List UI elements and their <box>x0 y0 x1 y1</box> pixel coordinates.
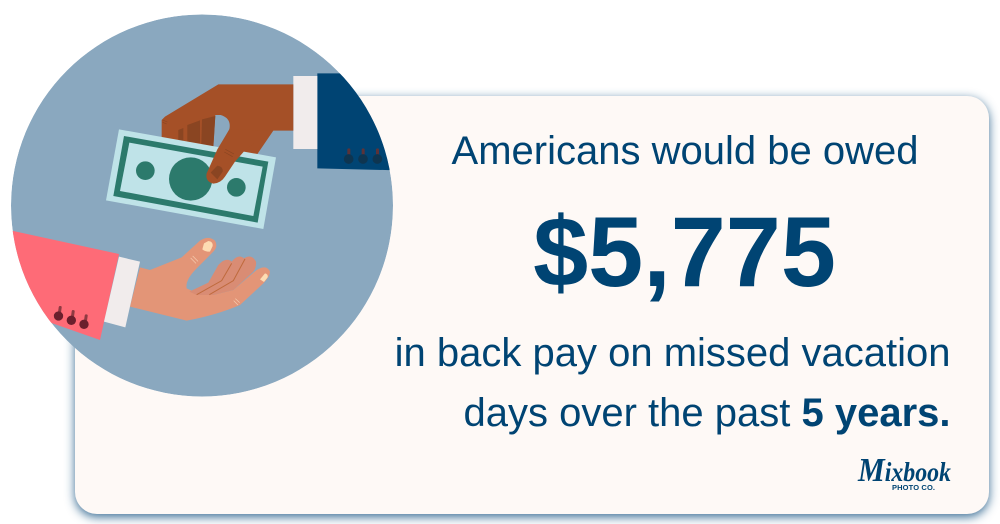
panel: text card <box>75 96 989 514</box>
icon: receiving hand with pink sleeve <box>0 227 270 340</box>
icon: pink sleeve buttons <box>54 306 89 329</box>
circle background <box>11 14 393 396</box>
big number: dollar amount: $5,775 <box>533 196 836 307</box>
icon: navy sleeve buttons <box>344 148 382 164</box>
illustration: hands exchanging money <box>0 14 410 396</box>
icon: thumb <box>206 129 273 184</box>
icon: dollar bill <box>106 129 276 229</box>
text block: years line: days over the past 5 years. <box>464 391 950 435</box>
heading: intro line: Americans would be owed <box>452 129 918 173</box>
logo: Mixbook Photo Co.: Mixbook <box>857 452 951 489</box>
icon: giving hand with navy sleeve <box>106 73 410 229</box>
logo: Mixbook Photo Co.: PHOTO CO. <box>892 483 935 492</box>
text block: back pay line: in back pay on missed vacation <box>395 331 950 375</box>
